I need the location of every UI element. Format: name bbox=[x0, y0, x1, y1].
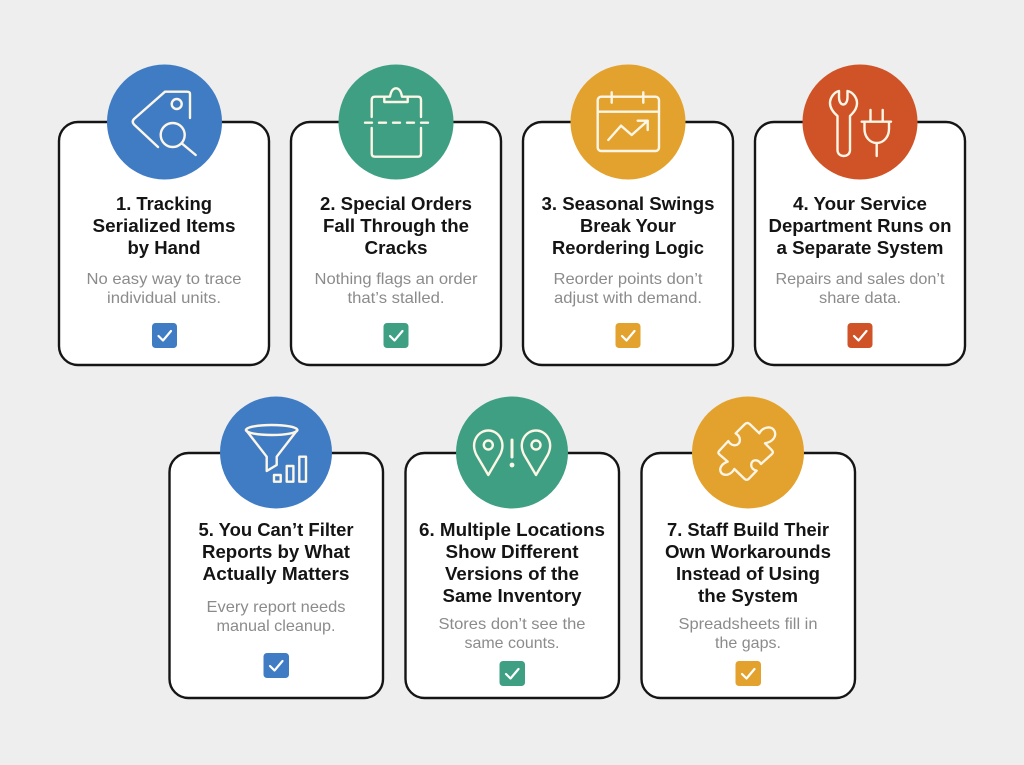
icon: puzzle piece bbox=[692, 396, 804, 508]
text: card 1 description: individual units. bbox=[107, 290, 221, 307]
text: card 7 description: the gaps. bbox=[715, 635, 781, 652]
icon: checkbox amber bbox=[616, 323, 640, 348]
icon: wrench and plug bbox=[802, 64, 918, 180]
icon: funnel with bars bbox=[220, 396, 332, 508]
icon: calendar with trend arrow bbox=[570, 64, 686, 180]
text: card 3 description: adjust with demand. bbox=[554, 290, 702, 307]
heading: card 5: 5. You Can’t Filter bbox=[198, 519, 354, 540]
text: card 4 description: Repairs and sales don’t bbox=[776, 271, 945, 288]
text: card 2 description: that’s stalled. bbox=[348, 290, 444, 307]
heading: card 6: Same Inventory bbox=[442, 585, 582, 606]
panel: card 2 bbox=[291, 64, 501, 365]
heading: card 3: Break Your bbox=[580, 215, 676, 236]
text: card 1 description: No easy way to trace bbox=[86, 271, 242, 288]
panel: card 6 bbox=[406, 396, 619, 698]
icon: two map pins with exclamation bbox=[456, 396, 568, 508]
panel: card 1 bbox=[59, 64, 269, 365]
icon: checkbox green bbox=[500, 661, 525, 686]
heading: card 4: 4. Your Service bbox=[793, 193, 927, 214]
heading: card 6: Versions of the bbox=[445, 563, 579, 584]
panel: card 3 bbox=[523, 64, 733, 365]
heading: card 4: Department Runs on bbox=[768, 215, 952, 236]
heading: card 1: Serialized Items bbox=[92, 215, 235, 236]
icon: checkbox blue bbox=[152, 323, 177, 348]
heading: card 7: 7. Staff Build Their bbox=[667, 519, 829, 540]
heading: card 5: Reports by What bbox=[202, 541, 350, 562]
panel: card 5 bbox=[170, 396, 383, 698]
heading: card 3: Reordering Logic bbox=[552, 237, 704, 258]
heading: card 2: Fall Through the bbox=[323, 215, 469, 236]
icon: price tag with magnifier bbox=[107, 64, 222, 180]
heading: card 4: a Separate System bbox=[776, 237, 944, 258]
icon: checkbox green bbox=[384, 323, 408, 348]
panel: card 7 bbox=[642, 396, 855, 698]
text: card 5 description: manual cleanup. bbox=[216, 618, 336, 635]
panel: card 4 bbox=[755, 64, 965, 365]
heading: card 2: Cracks bbox=[364, 237, 428, 258]
text: card 2 description: Nothing flags an order bbox=[314, 271, 478, 288]
heading: card 1: by Hand bbox=[128, 237, 200, 258]
icon: clipboard split by dashed line bbox=[338, 64, 454, 180]
heading: card 7: the System bbox=[698, 585, 798, 606]
heading: card 5: Actually Matters bbox=[202, 563, 350, 584]
heading: card 1: 1. Tracking bbox=[116, 193, 212, 214]
text: card 4 description: share data. bbox=[819, 290, 901, 307]
heading: card 7: Instead of Using bbox=[676, 563, 820, 584]
heading: card 2: 2. Special Orders bbox=[320, 193, 472, 214]
text: card 6 description: Stores don’t see the bbox=[438, 616, 586, 633]
heading: card 7: Own Workarounds bbox=[665, 541, 831, 562]
icon: checkbox amber bbox=[736, 661, 761, 686]
text: card 3 description: Reorder points don’t bbox=[554, 271, 703, 288]
text: card 6 description: same counts. bbox=[464, 635, 560, 652]
heading: card 6: 6. Multiple Locations bbox=[419, 519, 605, 540]
icon: checkbox red bbox=[848, 323, 872, 348]
text: card 7 description: Spreadsheets fill in bbox=[678, 616, 818, 633]
text: card 5 description: Every report needs bbox=[206, 599, 346, 616]
heading: card 6: Show Different bbox=[446, 541, 578, 562]
heading: card 3: 3. Seasonal Swings bbox=[542, 193, 714, 214]
icon: checkbox blue bbox=[264, 653, 289, 678]
